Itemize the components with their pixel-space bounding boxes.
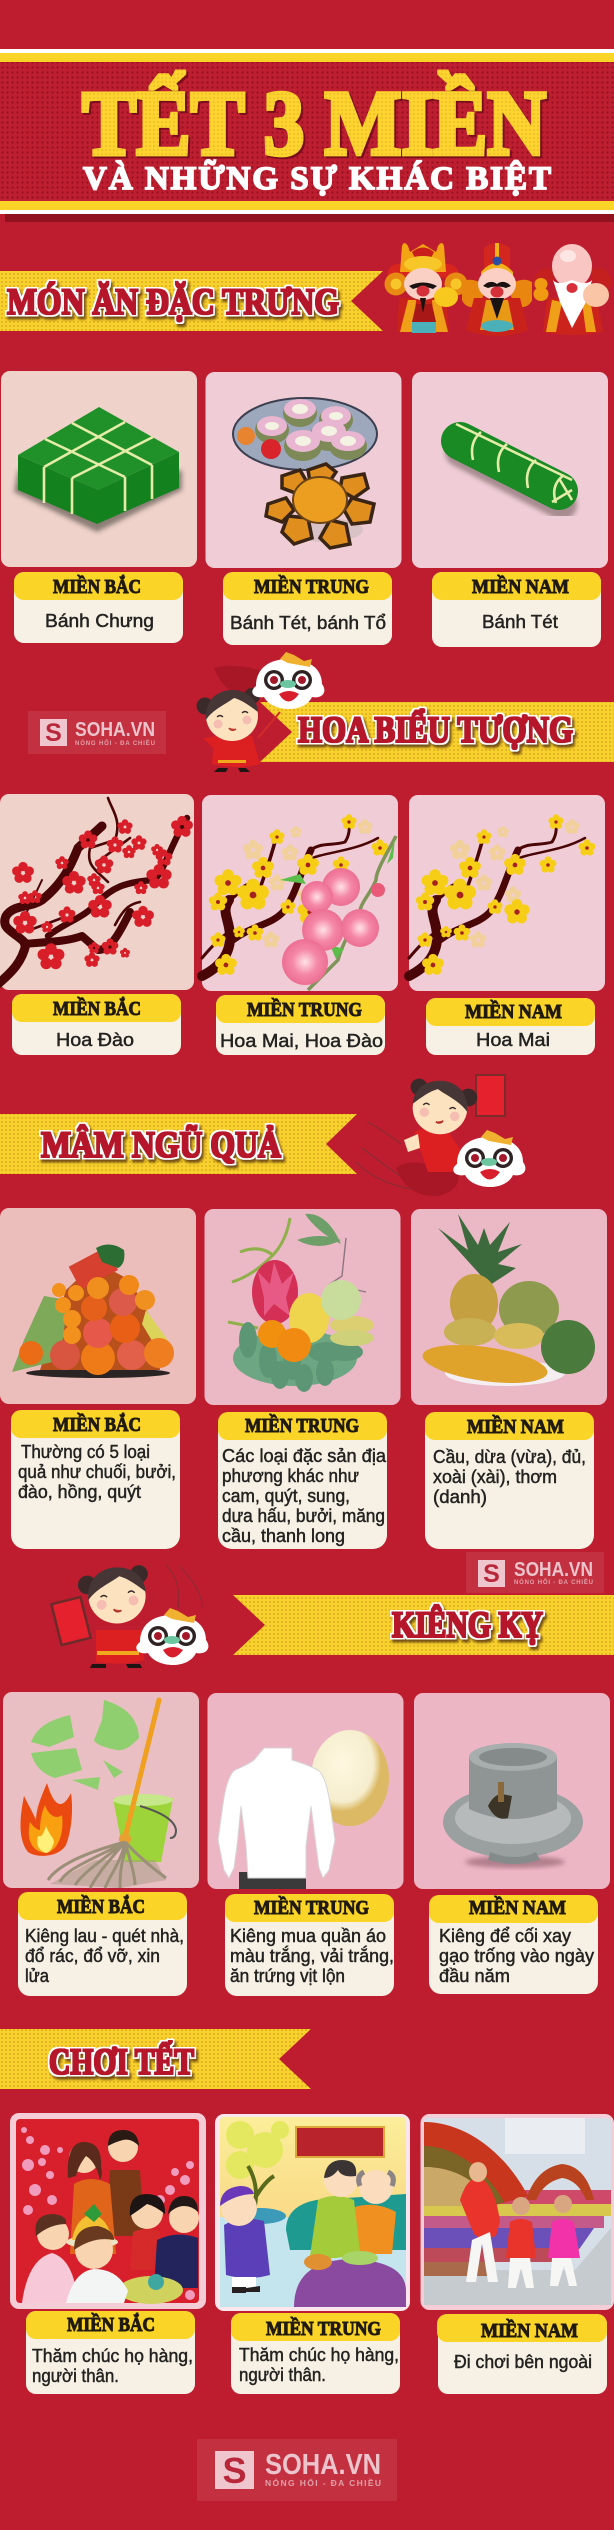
logo: soha.vn right: SOHA.VN (514, 1559, 593, 1581)
label: kiêng kỵ miền trung: Kiêng mua quần áo (230, 1926, 386, 1946)
icon: broken dish shards (31, 1700, 139, 1790)
panel: món ăn miền nam (412, 372, 608, 568)
label: chơi tết miền trung (231, 2313, 400, 2394)
icon: central fruit tray (228, 1214, 374, 1392)
label: chơi tết miền trung: MIỀN TRUNG (266, 2316, 381, 2340)
label: hoa mai miền nam: Hoa Mai (476, 1030, 550, 1050)
section banner: chơi tết: CHƠI TẾT (49, 2040, 194, 2083)
logo: soha.vn left: NÓNG HỔI - ĐA CHIỀU (75, 739, 155, 747)
label: chơi tết miền nam: MIỀN NAM (481, 2318, 578, 2342)
icon: white shirt (218, 1748, 335, 1889)
label: chơi tết miền bắc (26, 2311, 195, 2394)
label: hoa mai hoa đào miền trung: MIỀN TRUNG (247, 997, 362, 1021)
label: ngũ quả miền nam (425, 1412, 594, 1549)
label: chơi tết miền trung: Thăm chúc họ hàng, (239, 2345, 399, 2365)
label: ngũ quả miền nam: xoài (xài), thơm (433, 1467, 557, 1487)
label: kiêng kỵ miền bắc: đổ rác, đổ vỡ, xin (25, 1946, 160, 1966)
panel: ngũ quả miền trung (204, 1209, 400, 1405)
label: món ăn miền trung: MIỀN TRUNG (254, 574, 369, 598)
label: ngũ quả miền trung: cam, quýt, sung, (222, 1486, 350, 1506)
label: chơi tết miền nam: Đi chơi bên ngoài (454, 2352, 592, 2372)
section banner: kiêng kỵ (233, 1595, 614, 1655)
label: ngũ quả miền nam: Cầu, dừa (vừa), đủ, (433, 1447, 586, 1467)
label: hoa mai miền nam: MIỀN NAM (465, 999, 562, 1023)
logo: soha.vn left: S (45, 719, 62, 747)
label: kiêng kỵ miền trung (225, 1894, 394, 1996)
logo: soha.vn right: NÓNG HỔI - ĐA CHIỀU (514, 1578, 593, 1586)
label: kiêng kỵ miền bắc: lửa (25, 1966, 50, 1986)
icon: northern fruit tray (12, 1244, 174, 1378)
icon: stone rice mill (443, 1743, 583, 1868)
label: kiêng kỵ miền trung: ăn trứng vịt lộn (230, 1966, 345, 1986)
label: ngũ quả miền bắc: MIỀN BẮC (53, 1412, 141, 1436)
label: món ăn miền nam (432, 572, 601, 647)
logo: soha.vn right: S (483, 1560, 500, 1588)
label: ngũ quả miền bắc (11, 1410, 180, 1549)
icon: bánh chưng (14, 407, 182, 532)
panel: kiêng kỵ miền trung (208, 1693, 404, 1889)
icon: southern fruit tray (420, 1214, 595, 1390)
panel: ngũ quả miền nam (411, 1209, 607, 1405)
label: kiêng kỵ miền bắc: MIỀN BẮC (57, 1894, 145, 1918)
label: kiêng kỵ miền trung: MIỀN TRUNG (254, 1895, 369, 1919)
label: ngũ quả miền bắc: Thường có 5 loại (21, 1442, 150, 1462)
label: ngũ quả miền trung (218, 1412, 387, 1549)
illustration: wishing grandparents (220, 2121, 406, 2307)
illustration: family visit (21, 2127, 199, 2304)
title banner (0, 49, 614, 222)
logo: soha.vn left: SOHA.VN (75, 719, 155, 741)
icon: duck egg (311, 1730, 389, 1826)
label: kiêng kỵ miền bắc (18, 1892, 187, 1996)
panel: kiêng kỵ miền bắc (3, 1692, 199, 1888)
label: kiêng kỵ miền nam (429, 1895, 598, 1994)
god of longevity (533, 244, 612, 335)
logo: soha.vn bottom (197, 2439, 397, 2501)
label: kiêng kỵ miền nam: gạo trống vào ngày (439, 1946, 594, 1966)
panel: chơi tết miền nam (420, 2114, 614, 2310)
label: hoa đào miền bắc (12, 994, 181, 1055)
label: chơi tết miền bắc: MIỀN BẮC (67, 2312, 155, 2336)
label: món ăn miền bắc (14, 572, 183, 643)
label: món ăn miền nam: MIỀN NAM (472, 574, 569, 598)
label: ngũ quả miền trung: phương khác như (222, 1466, 359, 1486)
icon: flame (21, 1783, 72, 1856)
god of prosperity (462, 243, 532, 336)
panel: chơi tết miền bắc (10, 2113, 206, 2309)
label: kiêng kỵ miền trung: màu trắng, vải trắng, (230, 1945, 394, 1966)
label: ngũ quả miền nam: (danh) (433, 1487, 487, 1507)
logo: soha.vn bottom: NÓNG HỔI - ĐA CHIỀU (265, 2477, 381, 2488)
label: chơi tết miền bắc: Thăm chúc họ hàng, (32, 2346, 193, 2366)
label: ngũ quả miền trung: dưa hấu, bưởi, măng (222, 1506, 385, 1526)
label: món ăn miền trung: Bánh Tét, bánh Tổ (230, 613, 386, 633)
illustration: flower garden walk (424, 2118, 611, 2305)
label: món ăn miền trung (223, 572, 392, 645)
section banner: mâm ngũ quả: MÂM NGŨ QUẢ (41, 1123, 281, 1166)
section banner: món ăn đặc trưng: MÓN ĂN ĐẶC TRƯNG (7, 281, 339, 323)
label: ngũ quả miền bắc: quả như chuối, bưởi, (18, 1462, 176, 1482)
panel: hoa mai miền nam (409, 795, 605, 991)
label: chơi tết miền bắc: người thân. (32, 2366, 119, 2386)
icon: bánh tổ (266, 464, 374, 548)
logo: soha.vn left (28, 711, 166, 754)
logo: soha.vn bottom: SOHA.VN (265, 2449, 381, 2481)
icon: bucket and mop (48, 1700, 176, 1888)
panel: ngũ quả miền bắc (0, 1208, 196, 1404)
panel: chơi tết miền trung (215, 2114, 410, 2311)
icon: apricot branch (409, 814, 595, 976)
label: ngũ quả miền trung: cầu, thanh long (222, 1526, 345, 1546)
label: ngũ quả miền trung: Các loại đặc sản địa (222, 1446, 387, 1466)
label: ngũ quả miền trung: MIỀN TRUNG (245, 1413, 359, 1437)
icon: plate of bánh tét (233, 398, 377, 470)
label: chơi tết miền trung: người thân. (239, 2365, 326, 2385)
label: hoa mai miền nam (426, 998, 595, 1055)
icon: pink peach blossoms (280, 836, 396, 990)
label: kiêng kỵ miền nam: MIỀN NAM (469, 1895, 566, 1919)
panel: món ăn miền bắc (1, 371, 197, 567)
section banner: mâm ngũ quả (0, 1114, 357, 1174)
section banner: món ăn đặc trưng (0, 271, 383, 331)
panel: kiêng kỵ miền nam (414, 1693, 610, 1889)
label: hoa đào miền bắc: Hoa Đào (56, 1030, 134, 1050)
section banner: kiêng kỵ: KIÊNG KỴ (392, 1604, 543, 1646)
label: món ăn miền bắc: Bánh Chưng (45, 611, 154, 631)
label: món ăn miền nam: Bánh Tét (482, 612, 558, 632)
label: hoa mai hoa đào miền trung (216, 995, 385, 1055)
label: hoa đào miền bắc: MIỀN BẮC (53, 996, 141, 1020)
label: ngũ quả miền nam: MIỀN NAM (467, 1414, 564, 1438)
section banner: chơi tết (0, 2029, 311, 2089)
panel: hoa đào miền bắc (0, 794, 194, 990)
section banner: hoa biểu tượng (260, 702, 614, 762)
subtitle text: VÀ NHỮNG SỰ KHÁC BIỆT (83, 159, 551, 197)
logo: soha.vn right (466, 1552, 604, 1593)
icon: child with lion head, banner 4 (51, 1565, 208, 1668)
icon: bánh tét (456, 424, 572, 505)
label: ngũ quả miền bắc: đào, hồng, quýt (18, 1482, 141, 1502)
panel: hoa mai hoa đào miền trung (202, 795, 398, 991)
label: kiêng kỵ miền nam: đầu năm (439, 1966, 510, 1986)
label: kiêng kỵ miền nam: Kiêng để cối xay (439, 1926, 571, 1946)
label: món ăn miền bắc: MIỀN BẮC (53, 574, 141, 598)
title text: TẾT 3 MIỀN (82, 72, 546, 174)
icon: child with lion head, banner 2 (196, 652, 324, 772)
logo: soha.vn bottom: S (222, 2450, 247, 2491)
panel: món ăn miền trung (206, 372, 402, 568)
icon: red blossom branch (0, 798, 193, 984)
label: kiêng kỵ miền bắc: Kiêng lau - quét nhà, (25, 1926, 184, 1946)
label: hoa mai hoa đào miền trung: Hoa Mai, Hoa Đào (220, 1031, 383, 1051)
icon: three gods (384, 243, 612, 336)
label: chơi tết miền nam (437, 2314, 607, 2394)
icon: child with lion head, banner 3 (356, 1075, 525, 1196)
god of wealth (384, 243, 468, 333)
icon: apricot branch (202, 814, 388, 976)
